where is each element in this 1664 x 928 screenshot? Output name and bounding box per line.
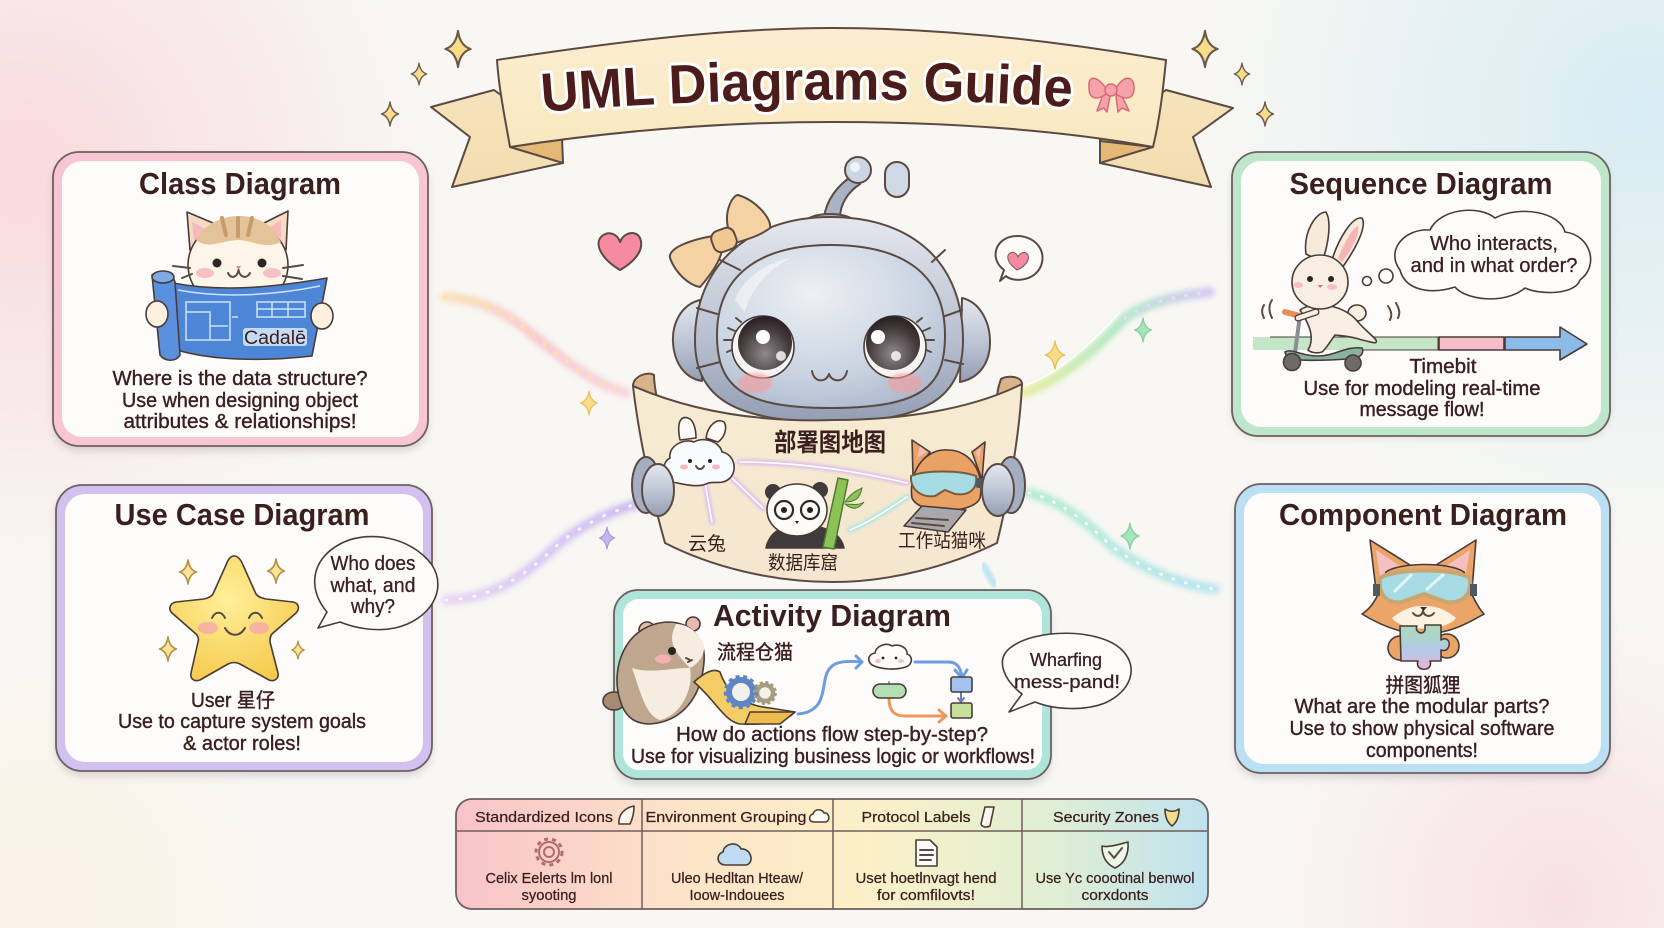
connector: component to robot [984, 493, 1215, 589]
icon: star sparkles [160, 559, 304, 661]
icon: pink bow [1089, 78, 1134, 112]
body text: User 星仔 [191, 689, 275, 712]
column: security zones: Security Zones [1053, 810, 1159, 826]
robot head [695, 217, 963, 422]
scroll labels: 数据库窟 [768, 552, 838, 574]
panel: use case diagram [56, 485, 438, 776]
body text: Use for visualizing business logic or workflows! [631, 746, 1035, 768]
robot head seams [697, 250, 963, 368]
body text: components! [1366, 740, 1478, 762]
heading: Activity Diagram [713, 598, 951, 633]
panel frame [53, 152, 428, 446]
body text [1290, 674, 1554, 762]
column: environment grouping [646, 810, 829, 904]
mascot label: 流程仓猫 [717, 641, 793, 664]
heading: Class Diagram [139, 166, 341, 201]
connector sparkles [581, 318, 1151, 549]
scroll labels: 云兔 [688, 533, 726, 555]
scroll sheet [633, 384, 1022, 582]
icon: heart [599, 233, 641, 270]
robot face screen [717, 245, 945, 408]
panel: component diagram [1235, 484, 1610, 778]
body text [1304, 356, 1540, 421]
body text: Where is the data structure? [112, 368, 368, 390]
thought bubble: Who interacts, [1430, 233, 1558, 255]
panel: class diagram [53, 152, 428, 451]
banner left tail [431, 90, 563, 187]
heading: Sequence Diagram [1290, 166, 1552, 201]
body text: 拼图狐狸 [1386, 674, 1460, 697]
column: standardized icons: Celix Eelerts lm lonl [486, 871, 612, 887]
column: security zones: corxdonts [1082, 888, 1148, 904]
panel shadow [1235, 490, 1610, 778]
robot left hand [632, 457, 674, 516]
panel frame [614, 590, 1051, 779]
icon: cloud bunny [664, 418, 734, 486]
panel: activity diagram [603, 590, 1131, 785]
banner folds [510, 138, 1153, 163]
panel shadow [56, 490, 432, 776]
scroll labels [688, 530, 986, 574]
robot bow [670, 195, 770, 287]
icon: goggle fox with puzzle [1362, 540, 1484, 669]
body text: Use to show physical software [1290, 718, 1554, 740]
icon: cat with blueprint: Cadalē [244, 328, 306, 349]
table frame [456, 799, 1208, 909]
column: standardized icons [475, 806, 634, 904]
column: environment grouping: Ioow-Indouees [690, 888, 784, 904]
panel frame [1232, 152, 1610, 436]
body text: What are the modular parts? [1294, 696, 1550, 718]
speech bubble: why? [350, 596, 395, 618]
flow nodes [873, 684, 906, 698]
robot right eye [864, 316, 934, 378]
thought bubble: and in what order? [1410, 255, 1578, 277]
scroll labels: 工作站猫咪 [898, 530, 986, 552]
robot right hand [982, 457, 1025, 516]
body text: Timebit [1410, 356, 1477, 378]
title banner [430, 27, 1234, 188]
thought bubble [1362, 210, 1591, 299]
column: standardized icons: syooting [522, 888, 576, 904]
icon: cat with blueprint [146, 211, 333, 360]
speech bubble: Who does [330, 553, 416, 575]
column: protocol labels: for comfilovts! [877, 888, 975, 904]
deployment network links [705, 462, 907, 530]
connector: sequence to robot [1024, 292, 1210, 393]
heading: Component Diagram [1279, 497, 1567, 532]
flow cloud node [869, 644, 911, 669]
speech bubble [315, 537, 438, 630]
robot mouth [812, 371, 847, 380]
robot ears [673, 298, 990, 382]
panel shadow [1232, 157, 1610, 437]
timeline arrow [1253, 327, 1587, 360]
sparkles around title [382, 31, 1273, 126]
column: environment grouping: Uleo Hedltan Hteaw/ [671, 871, 804, 887]
icon: rabbit on scooter [1262, 212, 1399, 371]
body text: attributes & relationships! [124, 411, 356, 433]
column: protocol labels: Uset hoetlnvagt hend [856, 871, 996, 887]
speech bubble: what, and [330, 575, 416, 597]
column: protocol labels [856, 807, 996, 904]
column: protocol labels: Protocol Labels [862, 810, 970, 826]
icon: heart speech bubble [996, 236, 1043, 281]
icon: smiling star [170, 556, 298, 681]
panel frame [56, 485, 432, 771]
body text: Use to capture system goals [118, 711, 366, 733]
flow arrows [798, 656, 967, 722]
body text [112, 368, 368, 433]
body text [631, 724, 1035, 768]
panel shadow [53, 157, 428, 451]
panel shadow [614, 595, 1051, 785]
banner right tail [1100, 90, 1233, 187]
panel: sequence diagram [1232, 152, 1610, 437]
map scroll [632, 374, 1025, 582]
body text: Use for modeling real-time [1304, 378, 1540, 400]
column: environment grouping: Environment Grouping [646, 810, 806, 826]
robot left eye [724, 316, 794, 378]
table grid [457, 799, 1207, 909]
panel frame [1235, 484, 1610, 773]
flow diagram [798, 644, 972, 722]
icon: panda with bamboo [765, 478, 864, 549]
heading: Use Case Diagram [114, 497, 370, 532]
connector: use case to robot [446, 504, 637, 600]
banner band [497, 28, 1166, 147]
scroll heading: 部署图地图 [774, 429, 886, 457]
speech bubble [1002, 633, 1131, 712]
main title: UML Diagrams Guide [540, 58, 1074, 115]
body text: & actor roles! [183, 733, 301, 755]
title curve guide [542, 100, 1072, 112]
icon: hamster with paper and gears [603, 617, 795, 724]
connector: class to robot [445, 297, 626, 393]
body text: How do actions flow step-by-step? [676, 724, 988, 746]
robot face highlight [735, 258, 790, 312]
robot mascot [670, 157, 990, 422]
column: security zones: Use Yc coootinal benwol [1036, 871, 1194, 887]
body text [118, 689, 366, 755]
column: standardized icons: Standardized Icons [475, 810, 613, 826]
column: security zones [1036, 809, 1194, 904]
scroll curls [633, 374, 1022, 400]
speech bubble: mess-pand! [1014, 672, 1120, 692]
body text: Use when designing object [122, 390, 358, 412]
legend table [456, 799, 1208, 909]
body text: message flow! [1360, 399, 1484, 421]
robot antenna [804, 157, 909, 234]
speech bubble: Wharfing [1030, 650, 1102, 670]
icon: goggle cat at keyboard [904, 440, 985, 532]
robot blush [738, 373, 922, 393]
